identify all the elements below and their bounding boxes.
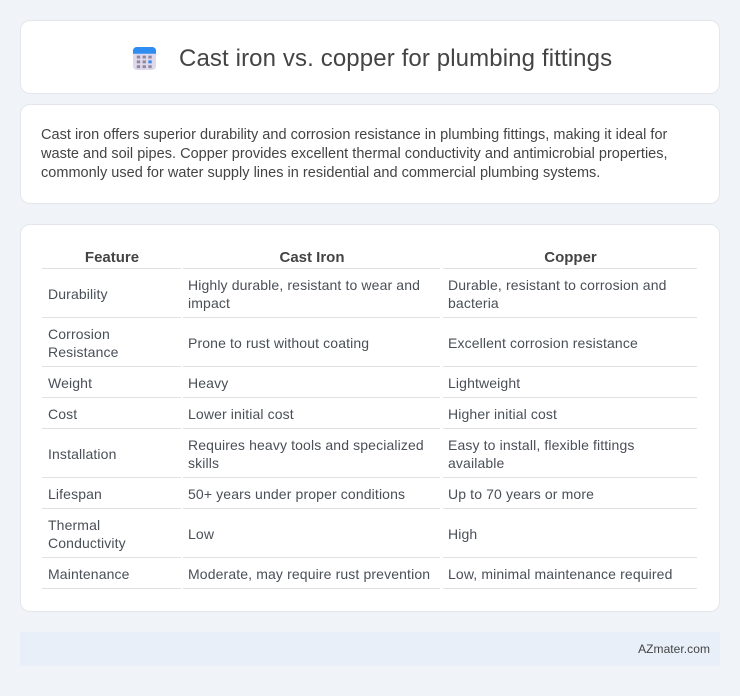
- row: Thermal Conductivity: Thermal: [48, 517, 100, 533]
- row: Maintenance: Maintenance: [48, 566, 130, 582]
- text: Moderate, may require rust prevention: [188, 566, 430, 582]
- text: impact: [188, 295, 230, 311]
- row: Installation: Installation: [48, 446, 116, 462]
- table header: Feature: Feature: [85, 249, 139, 266]
- text: 50+ years under proper conditions: [188, 486, 405, 502]
- text: Durable, resistant to corrosion and: [448, 277, 667, 293]
- icon: calendar: [132, 47, 156, 70]
- text: High: [448, 526, 477, 542]
- text: Lightweight: [448, 375, 520, 391]
- text: Low: [188, 526, 214, 542]
- text: Low, minimal maintenance required: [448, 566, 673, 582]
- text: Requires heavy tools and specialized: [188, 437, 424, 453]
- text: Highly durable, resistant to wear and: [188, 277, 420, 293]
- text: Up to 70 years or more: [448, 486, 594, 502]
- title: Cast iron vs. copper for plumbing fittings: [179, 45, 612, 72]
- footer credit: AZmater.com: [638, 642, 710, 656]
- row: Thermal Conductivity: [48, 517, 126, 551]
- row: Corrosion Resistance: Resistance: [48, 344, 119, 360]
- text: Heavy: [188, 375, 228, 391]
- row: Weight: Weight: [48, 375, 92, 391]
- intro text: Cast iron offers superior durability and corrosion resistance in plumbing fittings, making it ideal for: [41, 127, 667, 143]
- intro text: [41, 127, 668, 181]
- table header: Cast Iron: Cast Iron: [279, 249, 344, 266]
- row: Corrosion Resistance: Corrosion: [48, 326, 110, 342]
- title panel: [20, 20, 720, 94]
- text: Easy to install, flexible fittings: [448, 437, 635, 453]
- row: Lifespan: Lifespan: [48, 486, 102, 502]
- row: Cost: Cost: [48, 406, 77, 422]
- text: available: [448, 455, 504, 471]
- text: skills: [188, 455, 219, 471]
- text: Lower initial cost: [188, 406, 294, 422]
- footer bar: [20, 632, 720, 666]
- intro panel: [20, 104, 720, 204]
- table header: Copper: Copper: [544, 249, 597, 266]
- text: bacteria: [448, 295, 499, 311]
- text: Higher initial cost: [448, 406, 557, 422]
- row: Corrosion Resistance: [48, 326, 119, 360]
- text: Excellent corrosion resistance: [448, 335, 638, 351]
- row: Durability: Durability: [48, 286, 108, 302]
- intro text: waste and soil pipes. Copper provides excellent thermal conductivity and antimicrobial properties,: [41, 146, 668, 162]
- text: Prone to rust without coating: [188, 335, 369, 351]
- row: Thermal Conductivity: Conductivity: [48, 535, 126, 551]
- table panel: [20, 224, 720, 612]
- intro text: commonly used for water supply lines in residential and commercial plumbing systems.: [41, 165, 600, 181]
